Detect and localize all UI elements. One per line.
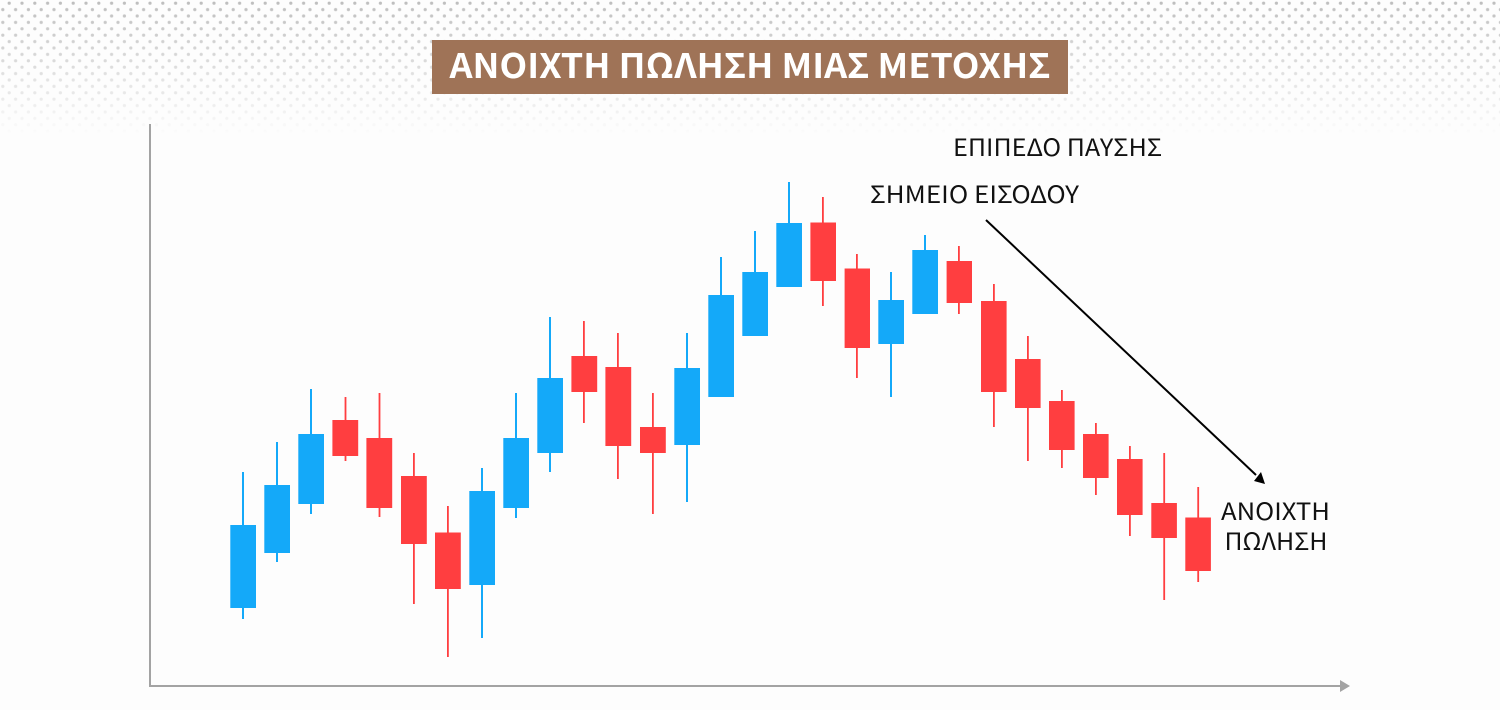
label: short sale — [1221, 492, 1330, 557]
label: entry point: ΣΗΜΕΙΟ ΕΙΣΟΔΟΥ — [870, 175, 1079, 210]
candlestick chart — [230, 182, 1211, 657]
label: stop level: ΕΠΙΠΕΔΟ ΠΑΥΣΗΣ — [953, 128, 1162, 163]
red candles — [332, 197, 1211, 657]
arrow: downward trend — [986, 220, 1265, 484]
dotted header background — [1, 2, 1500, 118]
title: ΑΝΟΙΧΤΗ ΠΩΛΗΣΗ ΜΙΑΣ ΜΕΤΟΧΗΣ — [448, 39, 1051, 88]
label: short sale: ΑΝΟΙΧΤΗ — [1221, 492, 1330, 527]
label: short sale: ΠΩΛΗΣΗ — [1224, 522, 1328, 557]
chart axes — [149, 124, 1350, 692]
blue candles — [230, 182, 938, 638]
